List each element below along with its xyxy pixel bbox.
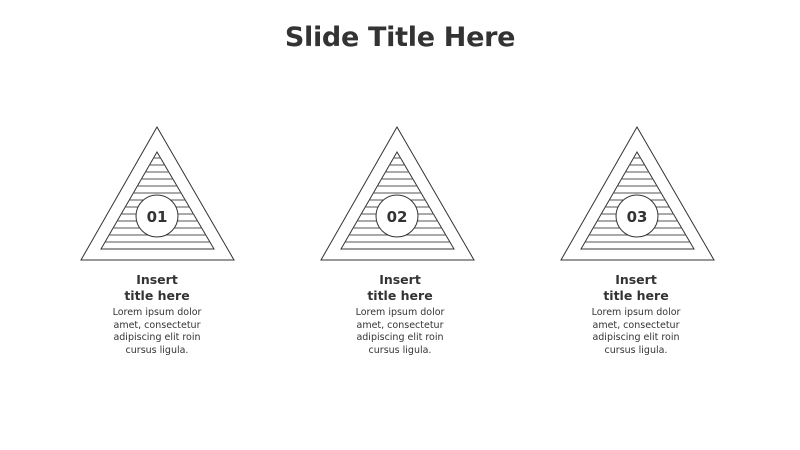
triangle 03 bbox=[561, 127, 714, 260]
text block 03: title here bbox=[603, 288, 669, 303]
text block 03: adipiscing elit roin bbox=[592, 332, 680, 343]
text block 01 bbox=[113, 272, 202, 356]
triangle 02: 02 bbox=[387, 208, 407, 226]
text block 01: title here bbox=[124, 288, 190, 303]
text block 03: cursus ligula. bbox=[605, 344, 667, 356]
text block 02: cursus ligula. bbox=[369, 344, 431, 356]
text block 01: adipiscing elit roin bbox=[113, 332, 201, 343]
diagram: triangles bbox=[80, 126, 715, 260]
triangle 03: 03 bbox=[627, 208, 647, 226]
text block 02: title here bbox=[367, 288, 433, 303]
text block 02: Insert bbox=[379, 272, 421, 287]
text block 02: amet, consectetur bbox=[356, 320, 443, 330]
text block 01: Lorem ipsum dolor bbox=[113, 307, 201, 318]
triangle 02 bbox=[321, 127, 474, 260]
text block 02: Lorem ipsum dolor bbox=[356, 307, 444, 318]
triangle 01 bbox=[81, 127, 234, 260]
text block 03 bbox=[592, 272, 680, 356]
text block 03: Insert bbox=[615, 272, 657, 287]
title: Slide Title Here bbox=[285, 22, 515, 53]
triangle 01: 01 bbox=[147, 208, 167, 226]
text block 01: cursus ligula. bbox=[126, 344, 188, 356]
text block 03: Lorem ipsum dolor bbox=[592, 307, 680, 318]
text block 02: adipiscing elit roin bbox=[356, 332, 444, 343]
text block 03: amet, consectetur bbox=[592, 320, 679, 330]
text block 01: amet, consectetur bbox=[114, 320, 200, 330]
text block 01: Insert bbox=[136, 272, 178, 287]
text block 02 bbox=[356, 272, 444, 356]
